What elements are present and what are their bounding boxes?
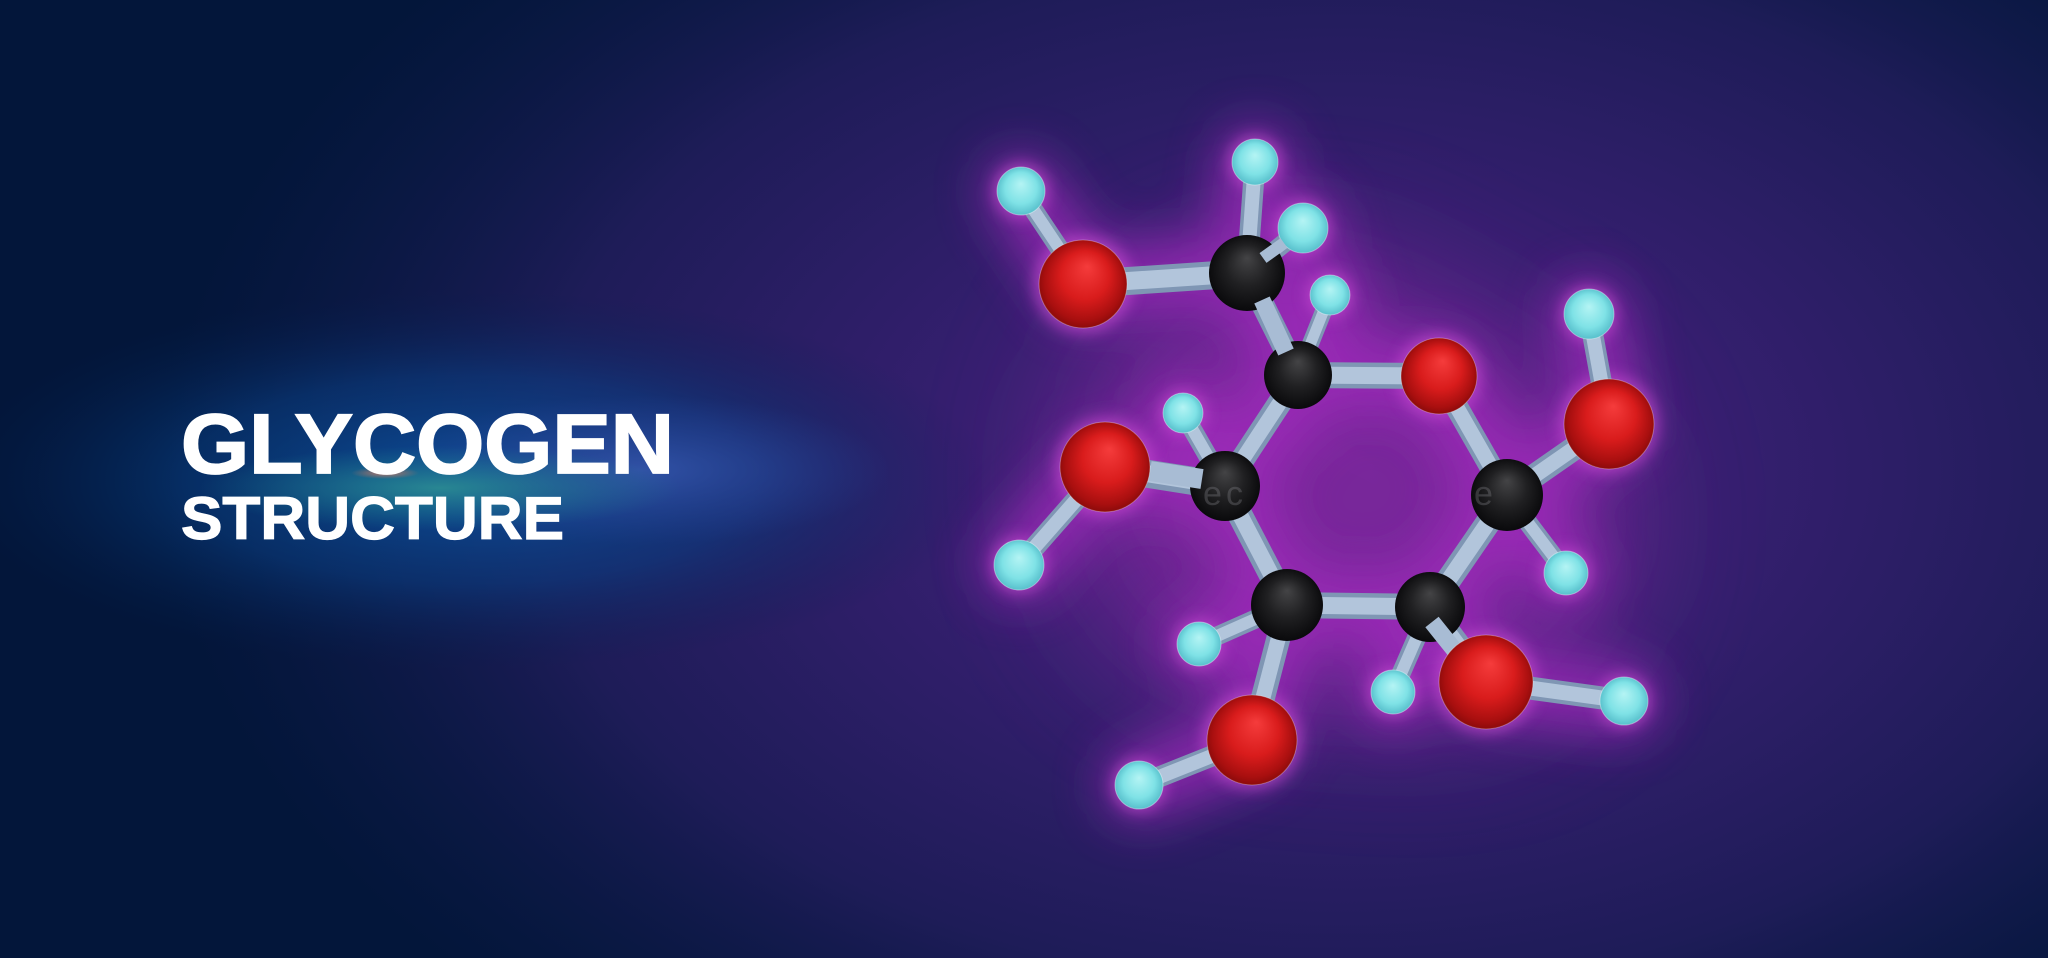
oxygen atoms <box>1039 240 1654 785</box>
stock watermark traces <box>1203 475 1493 513</box>
stock watermark traces: c <box>1226 475 1243 513</box>
carbon atoms <box>1190 235 1543 642</box>
title: glycogen structure <box>181 397 674 552</box>
subtitle line: STRUCTURE: STRUCTURE <box>181 485 564 552</box>
title line: GLYCOGEN: GLYCOGEN <box>181 397 674 491</box>
stock watermark traces: e <box>1203 475 1222 513</box>
magenta glow around molecule <box>990 134 1659 813</box>
bonds: shaded edges <box>1019 162 1624 785</box>
stock watermark traces: e <box>1474 475 1493 513</box>
bonds: bright centre <box>1019 162 1624 785</box>
molecule: glucose ball and stick model <box>994 139 1654 809</box>
upper bond overlaps on carbon atoms <box>1150 243 1456 652</box>
blue light glow behind title <box>0 290 990 670</box>
hydrogen atoms <box>994 139 1648 809</box>
